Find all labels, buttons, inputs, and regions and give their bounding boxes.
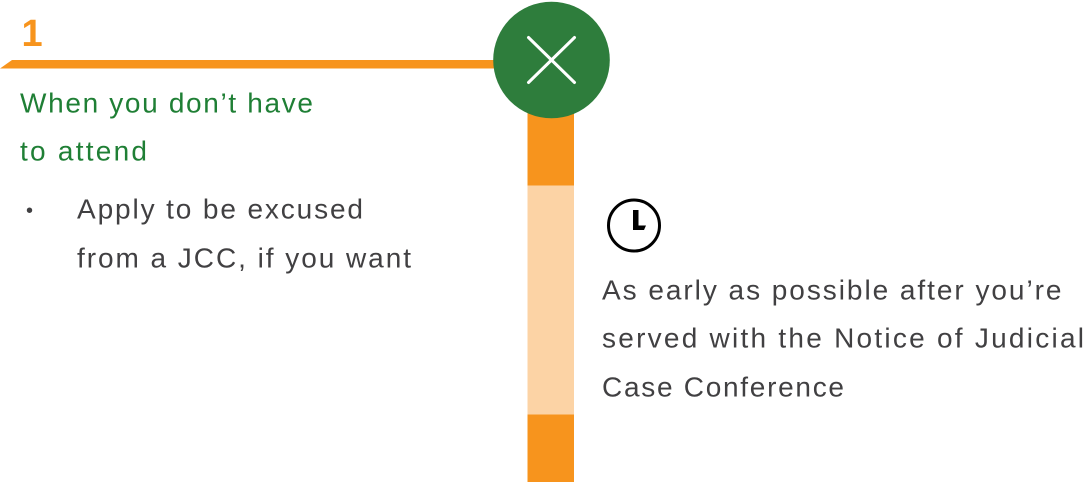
bullet list item: from a JCC, if you want [77,242,411,274]
timing description text: served with the Notice of Judicial [602,322,1084,354]
heading: when you don't have to attend: to attend [20,136,147,166]
timing description text: As early as possible after you’re [602,274,1062,306]
bullet list item: Apply to be excused [77,194,363,224]
icon: clock [608,200,660,251]
horizontal orange rule [0,60,500,68]
heading: when you don't have to attend [20,88,313,166]
bullet list item [26,194,411,274]
bullet list item: • [26,200,33,222]
timing description text: Case Conference [602,372,844,402]
timing description text [602,274,1084,402]
icon: green circle with cross [493,2,610,118]
heading: when you don't have to attend: When you don’t have [20,88,313,118]
step number: 1 [22,13,43,55]
vertical timeline bar [528,100,574,482]
